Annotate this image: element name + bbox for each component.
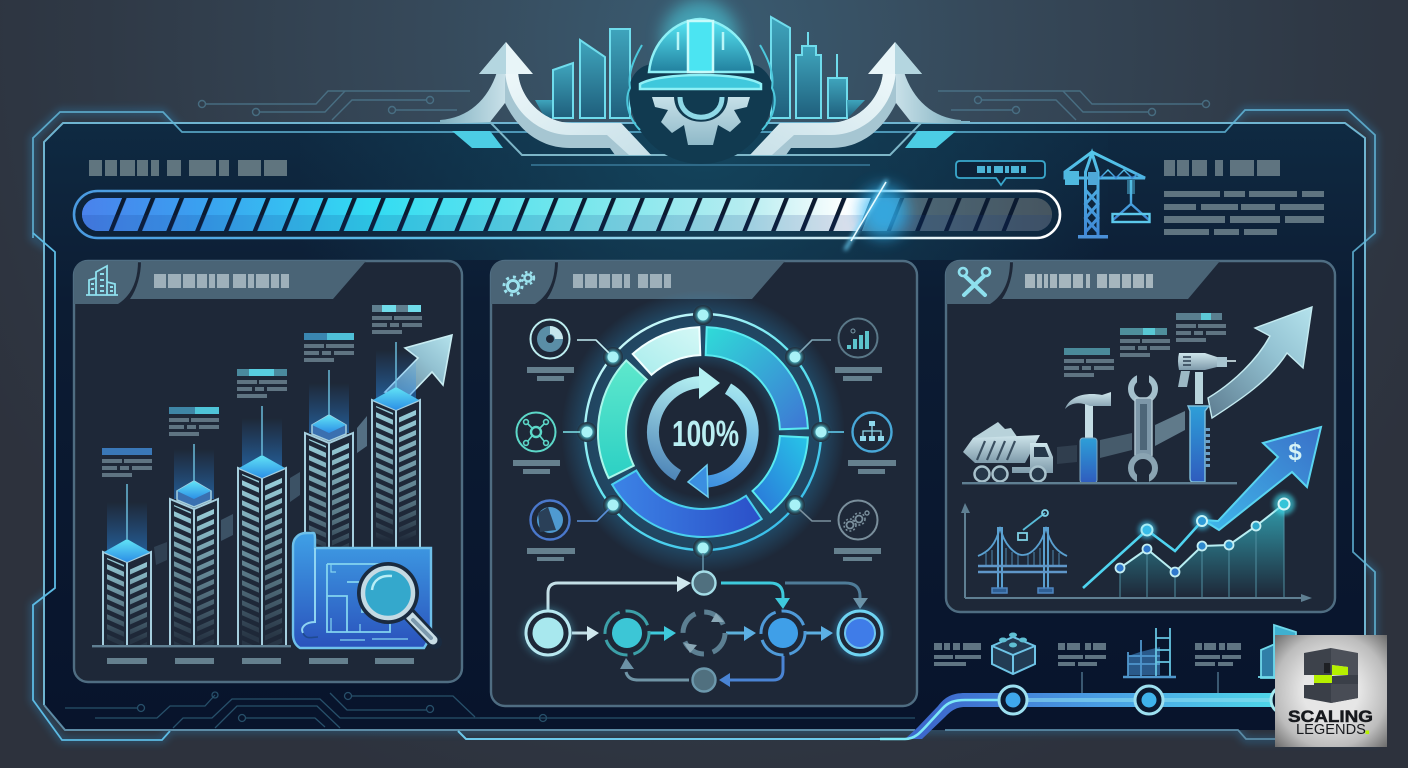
bar outline — [74, 191, 1060, 238]
icon: gears — [504, 272, 534, 295]
label — [527, 367, 574, 381]
milestone text 1 — [934, 643, 981, 666]
label — [527, 548, 575, 561]
logo mark — [1304, 648, 1358, 703]
ring nodes — [577, 305, 831, 558]
panel title — [573, 274, 671, 288]
chart axes — [961, 503, 1312, 602]
outer frame glow — [33, 110, 1375, 740]
icon: report pie — [530, 500, 570, 540]
panel: cycle — [491, 261, 917, 706]
milestone 1 — [999, 686, 1027, 714]
timeline highlight — [880, 700, 1020, 739]
line chart — [1083, 427, 1321, 597]
icon: gears — [838, 500, 878, 540]
panel title bar — [1002, 261, 1220, 299]
secondary line — [1120, 504, 1284, 572]
primary line — [1083, 521, 1218, 588]
progress bar — [74, 180, 1060, 250]
para blocks — [102, 305, 422, 477]
tower 3 — [238, 406, 286, 645]
panel tab — [491, 261, 555, 304]
logo subtitle: LEGENDS. — [1296, 722, 1370, 738]
chart points — [1116, 493, 1295, 576]
blueprint — [293, 533, 431, 648]
dollar arrow: $ — [1288, 439, 1302, 466]
bar segment gaps — [82, 198, 1052, 231]
milestone text 3 — [1195, 643, 1241, 666]
panel body — [74, 261, 462, 682]
icon: hammer — [1065, 392, 1111, 483]
header emblem — [440, 0, 970, 165]
bar right cap — [1006, 198, 1052, 231]
icon: bar chart — [838, 318, 878, 358]
top centre tint — [300, 123, 1108, 260]
header bracket band — [440, 122, 970, 165]
icon: drill — [1178, 353, 1236, 482]
baseline — [92, 645, 291, 647]
label — [848, 460, 896, 474]
icon: tower partially hidden — [1258, 625, 1296, 678]
bar lower shade — [82, 215, 1052, 231]
drop lines — [1120, 504, 1284, 597]
growth arrow left — [440, 42, 651, 155]
center value: 100% — [672, 413, 739, 454]
progress heading — [89, 160, 287, 176]
panel body — [946, 261, 1335, 612]
intro text block — [1164, 160, 1324, 235]
panel title bar — [547, 261, 785, 299]
milestone 2 — [1135, 686, 1163, 714]
panel tab — [74, 261, 138, 304]
panel tab — [946, 261, 1010, 304]
icon: crane — [1065, 152, 1150, 238]
logo wordmark: SCALING — [1288, 708, 1373, 726]
flow arrowheads — [587, 576, 868, 687]
icon: wrench — [1131, 370, 1155, 483]
panel: tools — [946, 261, 1335, 612]
timeline center line — [1020, 698, 1285, 702]
bar track fill — [82, 198, 1052, 231]
label — [835, 367, 882, 381]
logo lime dot — [1366, 730, 1369, 734]
loop arrows — [653, 367, 753, 497]
frame lines — [33, 110, 1375, 740]
rising arrow — [1057, 307, 1312, 464]
icon: block — [992, 632, 1035, 674]
hard hat glow — [662, 0, 738, 76]
milestone ticks — [1082, 672, 1218, 693]
first unfilled segment — [862, 198, 900, 231]
dollar arrow — [1203, 427, 1321, 530]
ring glow — [561, 290, 845, 574]
tower 5 — [372, 342, 420, 645]
milestone 3 — [1271, 686, 1299, 714]
label — [834, 548, 881, 561]
bar spark — [845, 180, 908, 250]
icon: rising scaffold — [1123, 628, 1176, 677]
circuit lines above frame — [198, 91, 1210, 120]
logo background — [1275, 635, 1387, 747]
process flow — [523, 572, 885, 692]
emblem ring arcs — [627, 45, 775, 130]
icon: city — [86, 266, 118, 295]
panel title — [154, 274, 289, 288]
panel title bar — [130, 261, 366, 299]
tower 4 — [305, 370, 353, 645]
icon: network — [516, 412, 556, 452]
flow nodes — [523, 572, 885, 692]
flow connectors — [548, 583, 860, 680]
bar left cap — [82, 198, 122, 231]
rising arrow — [385, 335, 452, 397]
para blocks — [1064, 313, 1226, 377]
tower 1 — [103, 484, 151, 645]
icon: org chart — [852, 412, 892, 452]
emblem skyline — [535, 17, 865, 118]
label — [513, 460, 560, 474]
arrow fragments behind towers — [154, 416, 367, 565]
milestone timeline — [880, 625, 1299, 739]
icon: dump truck — [963, 422, 1053, 482]
frame dark interior — [44, 123, 1365, 730]
milestone text 2 — [1058, 643, 1106, 666]
magnifier — [357, 562, 435, 642]
tooltip — [956, 161, 1045, 185]
tower 2 — [170, 444, 218, 645]
panel: buildings — [74, 261, 462, 682]
circuit lines bottom of frame — [65, 692, 915, 728]
icon: bridge — [978, 510, 1067, 593]
outer thin ring — [585, 314, 821, 550]
node connectors — [563, 340, 844, 572]
tower labels — [107, 658, 414, 664]
panel body — [491, 261, 917, 706]
icon: tools — [959, 268, 990, 295]
gear — [652, 97, 750, 145]
timeline band — [905, 693, 1285, 739]
hard hat — [640, 19, 761, 89]
icon: pie — [530, 320, 570, 358]
growth arrow right — [750, 42, 961, 155]
area fill — [1120, 504, 1284, 597]
logo — [1275, 635, 1387, 747]
tools baseline — [962, 482, 1237, 484]
emblem dark disc — [629, 64, 773, 164]
panel title — [1025, 274, 1153, 288]
donut chart — [598, 327, 808, 537]
